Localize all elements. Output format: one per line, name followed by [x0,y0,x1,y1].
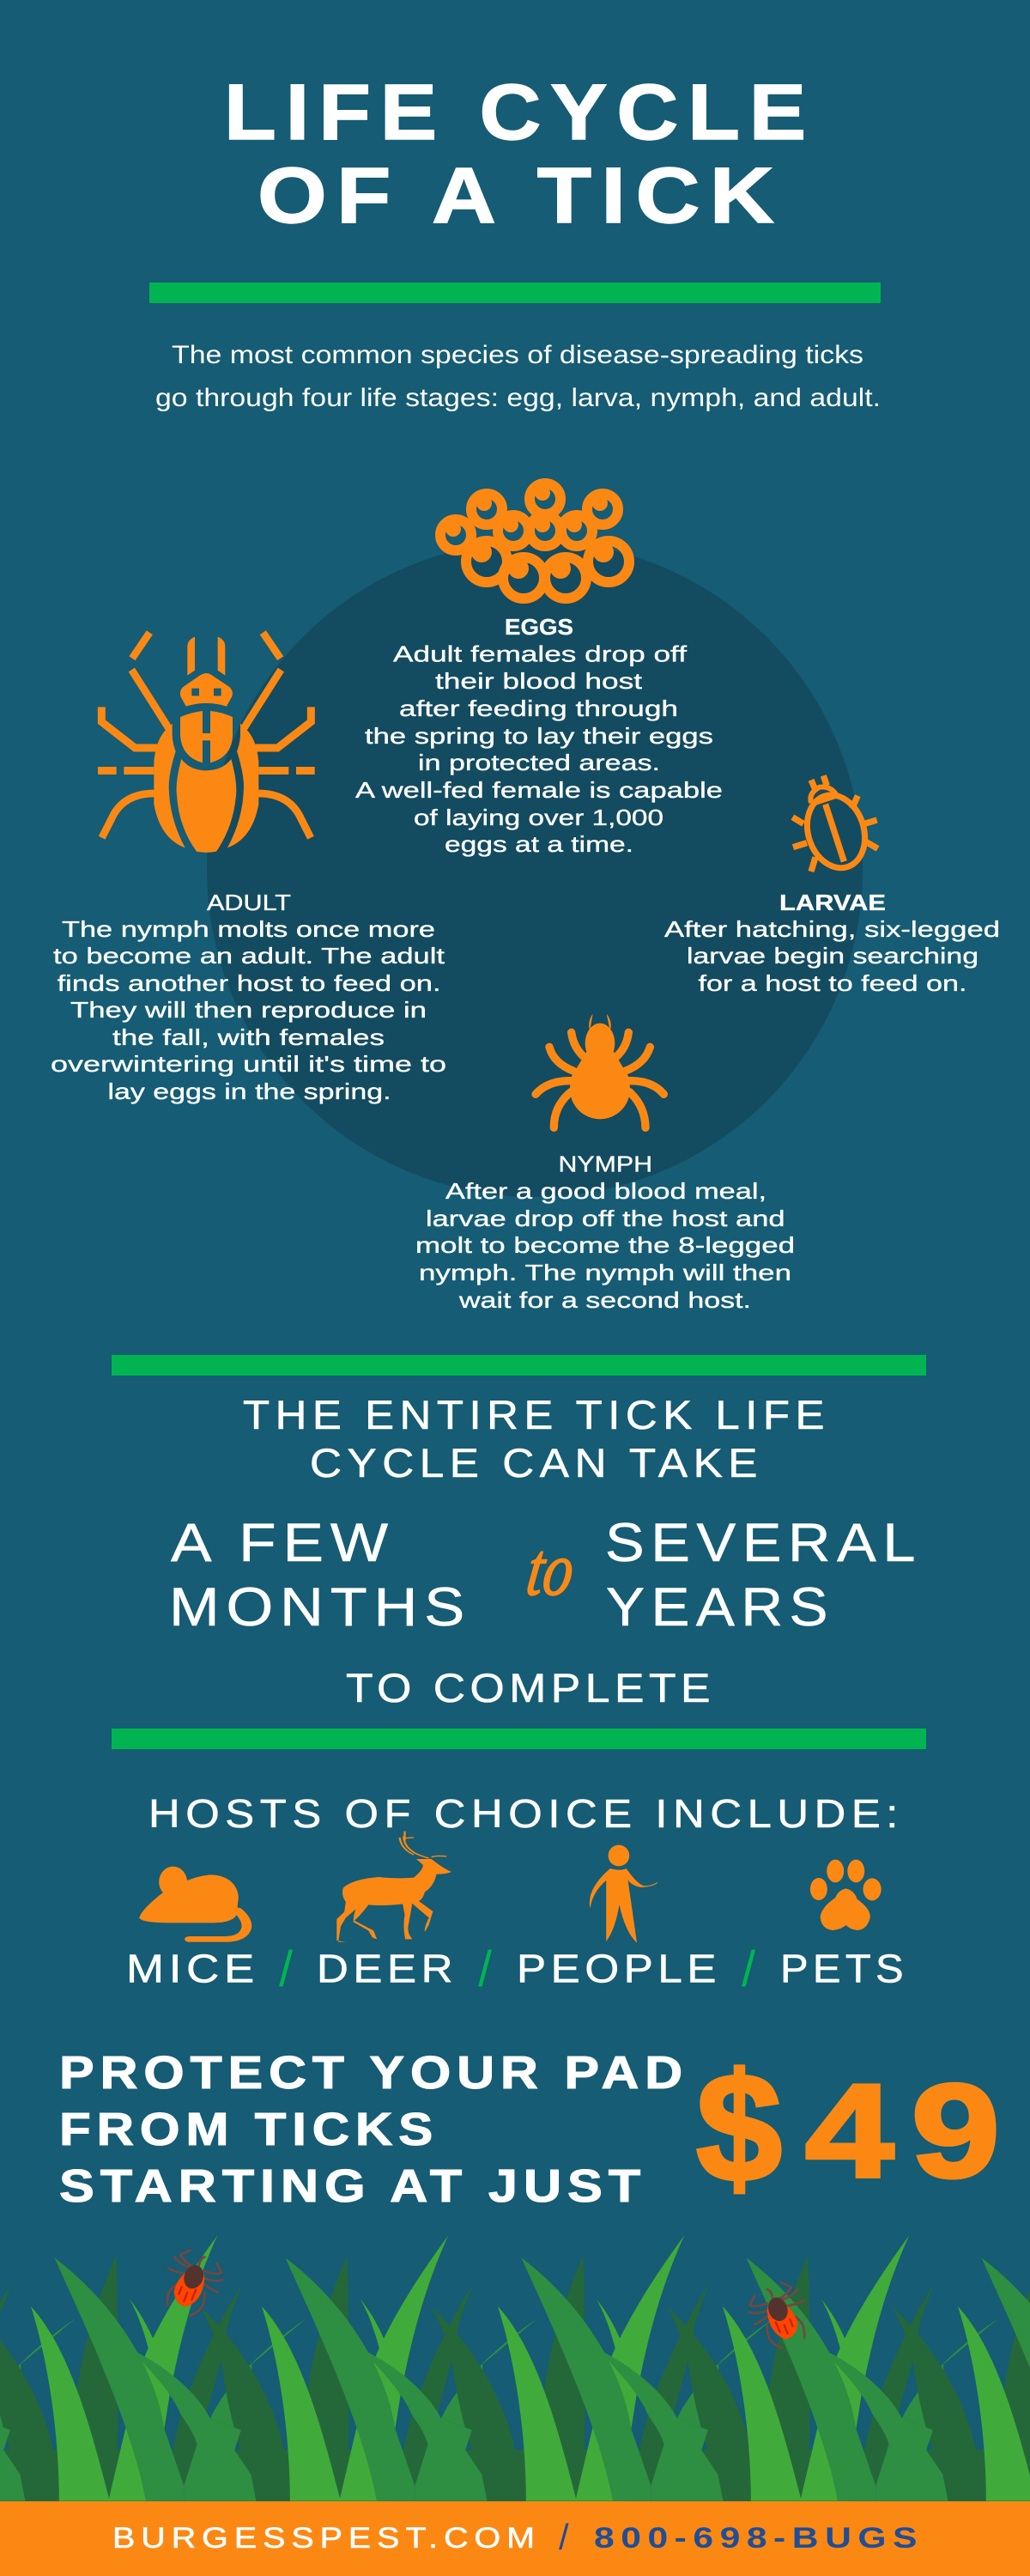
title: LIFE CYCLE [224,69,815,156]
protect your pad text: STARTING AT JUST [59,2160,646,2212]
title [224,69,815,240]
duration: a few months: A FEW [171,1513,395,1573]
eggs text: their blood host [435,668,643,694]
nymph text: nymph. The nymph will then [419,1260,791,1285]
eggs text: Adult females drop off [393,641,688,666]
host labels [126,1941,908,1997]
green divider [112,1728,926,1749]
duration: several years: SEVERAL [605,1513,922,1573]
adult text: ADULT [207,890,291,915]
duration: a few months: MONTHS [169,1577,471,1637]
icon: tick on grass left [167,2251,222,2316]
hosts heading: HOSTS OF CHOICE INCLUDE: [148,1791,904,1836]
life cycle dark circle [207,541,863,1197]
adult text: The nymph molts once more [62,916,435,942]
icon: mouse [139,1867,246,1939]
eggs text: of laying over 1,000 [414,805,663,830]
duration: a few months [169,1513,471,1637]
footer bar [0,2501,1030,2576]
host labels: MICE [126,1946,259,1990]
footer text: BURGESSPEST.COM [112,2522,541,2555]
nymph text [415,1151,795,1313]
duration: several years: YEARS [606,1577,834,1637]
icon: adult tick [98,633,315,853]
eggs text [355,614,723,857]
icon: paw [810,1860,882,1930]
price: 49 [805,2057,1000,2205]
eggs text: the spring to lay their eggs [365,723,713,749]
nymph text: NYMPH [558,1151,652,1176]
adult text: the fall, with females [112,1024,385,1050]
eggs text: EGGS [505,614,573,640]
intro text [155,341,881,412]
icon: nymph [536,1014,663,1127]
duration heading: CYCLE CAN TAKE [310,1440,763,1485]
adult text: finds another host to feed on. [58,970,441,996]
duration heading: THE ENTIRE TICK LIFE [243,1392,830,1437]
intro text: go through four life stages: egg, larva, nymph, and adult. [155,384,881,412]
larvae text: larvae begin searching [687,943,978,969]
nymph text: wait for a second host. [458,1287,751,1313]
icon: deer [336,1832,451,1942]
footer text: 800-698-BUGS [594,2522,924,2555]
green divider [149,283,881,303]
grass [0,2235,1030,2501]
host labels: DEER [317,1946,457,1990]
protect your pad text: PROTECT YOUR PAD [59,2047,688,2099]
green divider [112,1355,926,1376]
duration: to: to [522,1528,579,1612]
eggs text: after feeding through [399,696,678,721]
title: OF A TICK [258,152,784,240]
eggs text: A well-fed female is capable [355,777,723,803]
icon: person [590,1845,658,1943]
adult text: lay eggs in the spring. [108,1078,391,1104]
eggs text: in protected areas. [418,750,660,775]
host labels: / [279,1941,294,1997]
footer text [112,2517,924,2557]
eggs text: eggs at a time. [445,831,633,857]
larvae text: LARVAE [779,890,886,915]
nymph text: After a good blood meal, [445,1178,766,1204]
protect your pad text [59,2047,688,2212]
icon: larvae [792,775,878,876]
host labels: / [478,1941,493,1997]
host labels: PEOPLE [517,1946,721,1990]
duration: several years [605,1513,922,1637]
host labels: / [742,1941,756,1997]
duration heading [243,1392,830,1485]
larvae text: After hatching, six-legged [664,916,1000,942]
intro text: The most common species of disease-spreading ticks [172,341,863,369]
to complete: TO COMPLETE [346,1665,715,1710]
adult text: They will then reproduce in [70,997,427,1023]
icon: tick on grass right [749,2282,804,2348]
nymph text: larvae drop off the host and [426,1206,785,1231]
protect your pad text: FROM TICKS [59,2104,439,2155]
icon: eggs [440,483,629,598]
host labels: PETS [780,1946,908,1990]
adult text: overwintering until it's time to [51,1051,446,1077]
nymph text: molt to become the 8-legged [415,1232,795,1258]
adult text: to become an adult. The adult [53,943,445,969]
larvae text [664,890,1000,996]
footer text: / [559,2517,569,2557]
price: $ [696,2042,782,2215]
larvae text: for a host to feed on. [699,970,966,996]
adult text [51,890,446,1104]
price [696,2042,1000,2215]
